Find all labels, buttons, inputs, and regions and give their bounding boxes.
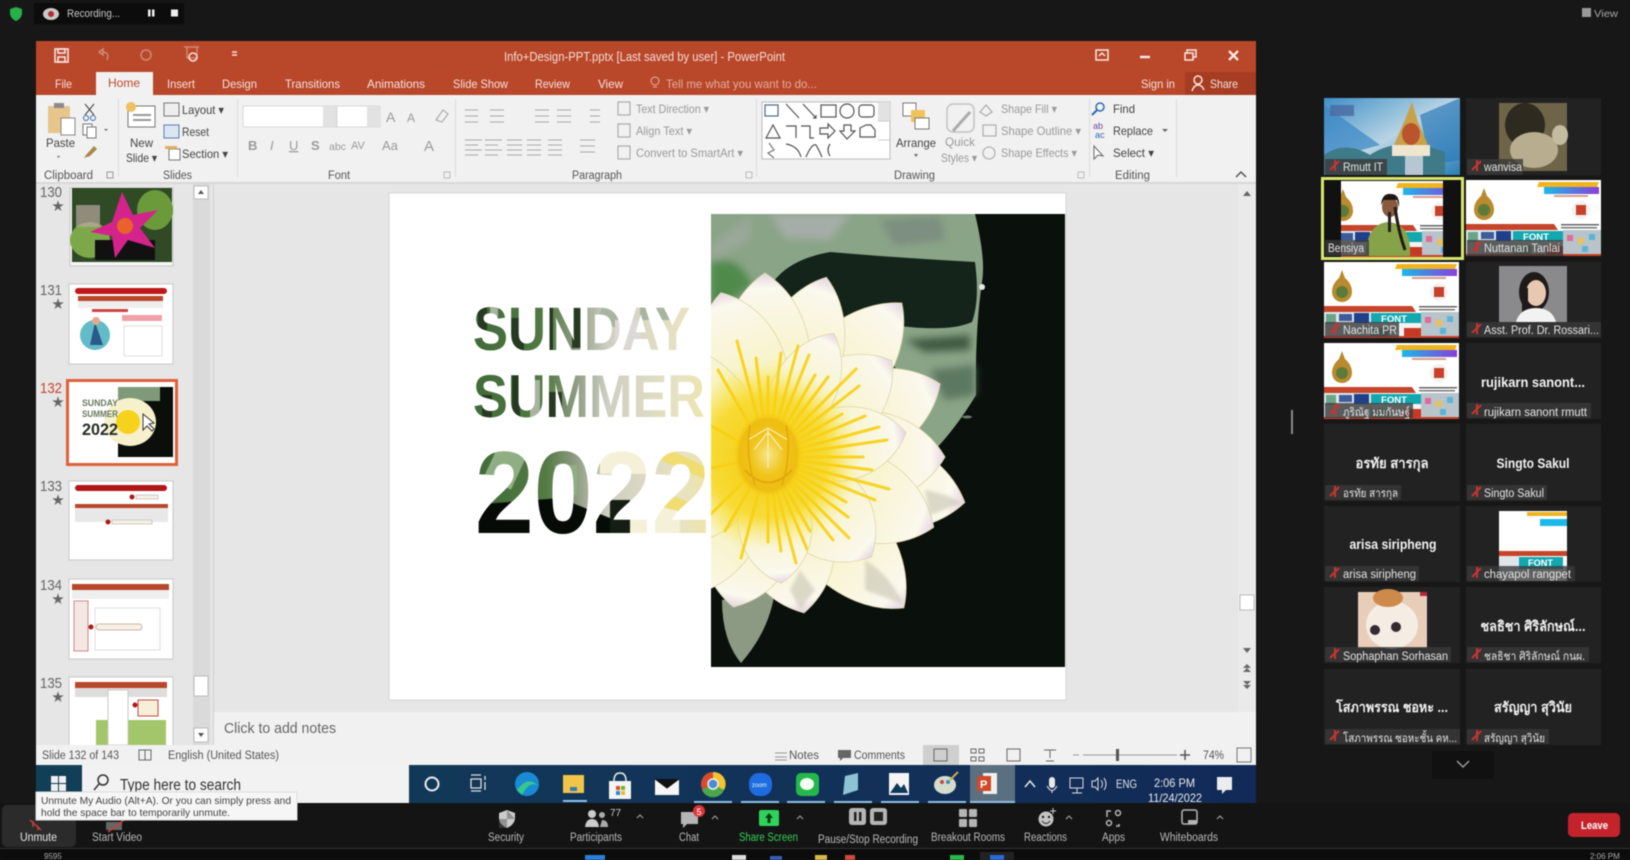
tile: arisa siripheng: arisa siripheng [1343,569,1416,581]
gallery next page chevron [1432,751,1494,779]
view button: View [1594,8,1618,20]
tile: Saranya [1466,669,1601,745]
start video: Start Video [92,832,142,844]
security [488,810,524,844]
group: font [243,106,450,182]
tile: chayapol rangpet: chayapol rangpet [1484,569,1572,581]
tile: Chonthicha: ชลธิชา ศิริลักษณ์... [1480,618,1586,634]
group: paragraph: Text Direction ▾ [636,102,709,116]
group: slides: Reset [182,125,210,139]
tabs: Animations [367,77,425,91]
slide number labels: ★ [52,690,64,704]
group: font: AV [351,140,366,152]
status bar [36,745,1256,765]
tile: Nachita PR [1324,262,1459,338]
participants: Participants [570,832,622,844]
group: drawing: Arrange [896,136,936,150]
apps [1102,810,1125,844]
tile: chayapol rangpet: FONT [1528,558,1554,568]
thumbnail 132 selected: SUMMER [82,409,118,419]
tabs: View [598,77,623,91]
tooltip: hold the space bar to temporarily unmute. [41,807,230,819]
participants [570,808,643,844]
thumbnail 133 [69,481,173,560]
tile: Thai name orathai: อรทัย สารกุล [1343,488,1398,500]
tile: Saranya: สรัญญา สุวินัย [1484,732,1545,745]
tile: Bensiya active speaker [1322,178,1462,258]
whiteboards [1160,810,1223,844]
pause stop recording: Pause/Stop Recording [818,834,918,846]
tile: Thai named participant [1324,343,1459,419]
slide title text [473,295,710,558]
system tray [1025,776,1232,805]
slide number labels: ★ [52,395,64,409]
status bar: Comments [854,750,905,762]
panel divider handle [1291,410,1293,434]
whiteboards: Whiteboards [1160,832,1218,844]
group: font: A [386,109,396,125]
group: drawing: Shape Fill ▾ [1001,102,1057,116]
slide number labels: 132 [40,380,62,397]
recording status bar [10,3,184,24]
bottom windows strip [44,852,1620,860]
apps: Apps [1102,832,1125,844]
powerpoint window [36,41,1256,805]
tile: arisa siripheng [1324,506,1460,582]
window controls [1096,50,1238,60]
group: slides: Slide ▾ [126,151,157,165]
group: clipboard: Paste [46,136,75,150]
group: drawing: Quick [945,135,976,149]
start video [92,820,142,844]
breakout rooms [931,809,1005,844]
shadows on petals [790,490,962,610]
notes bar [214,712,1256,745]
icon: recording cloud [43,8,59,20]
search box: Type here to search [120,777,241,794]
flower petals [710,272,966,614]
tile: Chonthicha: ชลธิชา ศิริลักษณ์ กนผ. [1484,649,1585,663]
tile: Singto Sakul [1466,424,1601,501]
slide title text: SUNDAY [473,295,690,363]
unmute button: Unmute [20,832,57,844]
group: editing: Select ▾ [1113,146,1154,160]
group: editing: Editing [1115,170,1150,182]
main slide [389,193,1066,700]
tabs: Design [222,77,257,91]
thumbnail 135 [68,676,174,746]
slide number labels: 130 [40,184,62,201]
tile: Sopaphan: โสภาพรรณ ชอหะ ... [1335,698,1448,715]
tile: Singto Sakul: Singto Sakul [1484,488,1544,500]
tile: Rmutt IT [1324,98,1460,175]
group: slides: New [130,136,153,150]
group: slides: Layout ▾ [182,103,224,117]
group: clipboard [44,103,113,182]
group: slides: Slides [163,170,192,182]
tile: rujikarn sanont: rujikarn sanont... [1481,374,1585,390]
slide title text: 2022 [475,427,710,558]
security: Security [488,832,524,844]
share screen [739,810,803,844]
status bar: 74% [1203,750,1224,762]
slide number labels [40,184,64,704]
tabs: Share [1210,77,1238,91]
status bar: Notes [789,750,819,762]
tooltip: Unmute My Audio (Alt+A). Or you can simply press and [41,795,291,807]
tile: Sopaphan [1324,669,1460,745]
share screen: Share Screen [739,832,798,844]
group: font: A [407,111,415,125]
windows taskbar [36,765,1256,805]
system tray: 2:06 PM [1154,776,1195,790]
group: font: B [248,138,257,153]
group: drawing: Styles ▾ [941,151,977,165]
slide number labels: ★ [52,493,64,507]
tile: Sophaphan Sorhasan [1324,587,1460,663]
tile: Thai name orathai: อรทัย สารกุล [1356,455,1428,472]
tile: Thai name orathai [1324,424,1460,501]
group: paragraph: Align Text ▾ [636,124,692,138]
tile: Nuttanan Tanlai: Nuttanan Tanlai [1484,243,1560,255]
tile: arisa siripheng: arisa siripheng [1350,536,1436,552]
slide number labels: 131 [40,282,62,299]
tile: wanvisa: wanvisa [1483,162,1523,174]
tile: Nuttanan Tanlai [1466,180,1601,256]
title: Info+Design-PPT.pptx [Last saved by user] - PowerPoint [504,50,785,64]
notes bar: Click to add notes [224,720,336,737]
group: font: I [270,138,274,153]
task icons: zoom [752,783,767,789]
thumbnail 131 [69,284,173,364]
thumbnail scrollbar [194,186,208,742]
reactions: Reactions [1024,832,1067,844]
group: font: Font [328,170,351,182]
slide scrollbar [1238,184,1256,712]
tile: Nachita PR: Nachita PR [1343,325,1397,337]
unmute button [2,805,76,847]
ribbon [36,95,1256,184]
tile: Saranya: สรัญญา สุวินัย [1494,699,1572,716]
group: font: Aa [382,138,399,153]
icons: quick access [99,47,237,61]
group: drawing: Shape Effects ▾ [1001,146,1077,160]
tabs: Slide Show [453,77,508,91]
tile: Asst. Prof. Dr. Rossari [1466,262,1601,338]
slide number labels: 133 [40,478,62,495]
tile: chayapol rangpet [1466,506,1601,582]
title bar [36,41,1256,96]
thumbnail 130 [70,188,173,266]
status bar: English (United States) [168,750,279,762]
group: drawing: Drawing [894,170,935,182]
tile: Thai named participant: FONT [1381,395,1407,406]
tabs [55,72,1256,96]
icon: save [55,49,68,62]
view button [1582,8,1618,20]
group: font: S [311,138,320,153]
group: font: abc [329,141,346,153]
tile: Sophaphan Sorhasan: Sophaphan Sorhasan [1343,651,1448,663]
thumbnail 134 [69,579,173,659]
chat [679,805,718,844]
tooltip [36,792,297,820]
tile: Nachita PR: FONT [1381,314,1407,325]
group: editing: ab [1093,121,1103,131]
slide number labels: ★ [52,592,64,606]
slide number labels: ★ [52,199,64,213]
tabs: Home [108,76,140,90]
chat: Chat [679,832,700,844]
status bar: Slide 132 of 143 [42,750,119,762]
group: clipboard: Clipboard [44,170,93,182]
slide title text: SUMMER [473,363,705,430]
zoom toolbar [0,803,1630,860]
search box [82,765,409,803]
thumbnail 132 selected [68,380,176,464]
system tray: ENG [1116,779,1137,791]
tile: Bensiya active speaker: Bensiya [1328,243,1365,255]
leaf [711,214,985,455]
recording status bar: Recording... [67,8,120,20]
system tray: 11/24/2022 [1148,791,1202,805]
group: drawing: Shape Outline ▾ [1001,124,1081,138]
icon: windows start [51,776,66,791]
chat: 5 [696,807,702,817]
participants: 77 [610,808,622,819]
tabs: Review [535,77,570,91]
photo: water lily [710,213,1066,668]
thumbnail 132 selected: SUNDAY [82,398,118,408]
pause stop recording [818,808,918,846]
task icons: P [980,779,987,791]
participant gallery [1322,98,1601,779]
tabs: Insert [167,77,196,91]
group: paragraph [465,102,752,182]
slide number labels: 134 [40,577,62,594]
tile: Asst. Prof. Dr. Rossari: Asst. Prof. Dr. Rossari... [1484,325,1599,337]
tile: Sopaphan: โสภาพรรณ ซอหะชั้น คห... [1343,730,1457,745]
group: slides [126,102,228,182]
thumbnail 132 selected: 2022 [82,420,118,439]
tile: rujikarn sanont: rujikarn sanont rmutt [1484,407,1588,419]
reactions [1024,808,1072,844]
tabs: Transitions [285,77,340,91]
icon: security shield [10,7,22,21]
tile: wanvisa [1466,98,1601,175]
group: editing [1092,102,1246,182]
tile: Thai named participant: ภูริณัฐ มมกันษฐ์ [1343,405,1410,419]
tile: rujikarn sanont [1466,343,1601,419]
slide number labels: ★ [52,297,64,311]
group: slides: Section ▾ [182,147,228,161]
group: paragraph: Paragraph [572,170,622,182]
flower yellow stamens [710,338,892,566]
leave button: Leave [1581,820,1608,832]
flower bud [722,590,775,663]
group: editing: ac [1095,130,1105,140]
tile: Singto Sakul: Singto Sakul [1496,455,1570,471]
breakout rooms: Breakout Rooms [931,832,1005,844]
slide editing area [214,184,1256,745]
tile: Nuttanan Tanlai: FONT [1523,232,1549,243]
group: editing: Replace [1113,124,1153,138]
tile: Rmutt IT: Rmutt IT [1343,162,1383,174]
tabs: Tell me what you want to do... [666,77,817,91]
leave button [1568,813,1620,837]
tabs: Sign in [1141,77,1175,91]
group: paragraph: Convert to SmartArt ▾ [636,146,743,160]
tile: Chonthicha [1466,587,1601,663]
group: editing: Find [1113,102,1135,116]
group: drawing [762,102,1084,182]
slide number labels: 135 [40,675,62,692]
group: font: U [289,138,298,153]
tabs: File [55,77,72,91]
task icons [426,765,1015,803]
slide thumbnail panel [36,184,214,757]
group: font: A [424,138,434,155]
